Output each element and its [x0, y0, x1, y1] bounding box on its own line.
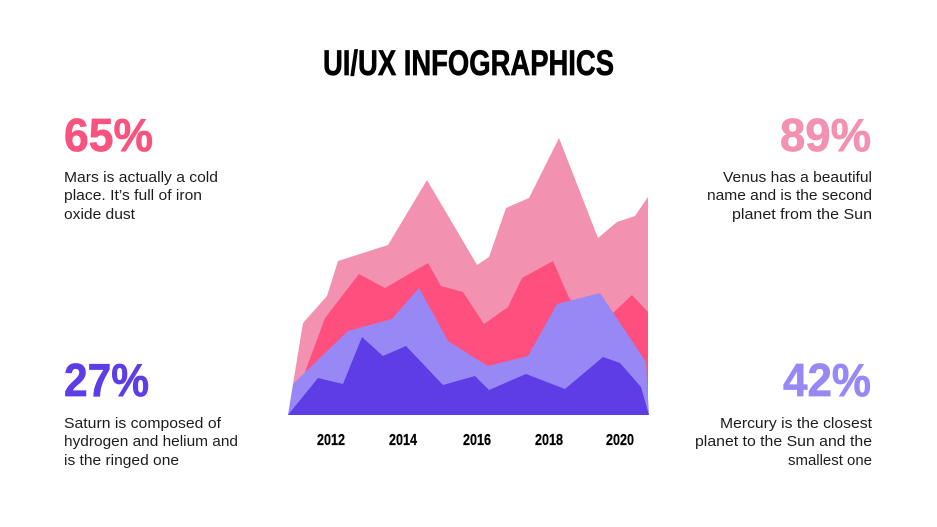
stat: 89%: 89%	[780, 109, 871, 161]
x-axis labels: 2014	[389, 432, 417, 449]
text block: Mars description	[64, 169, 218, 223]
series: lavender area	[288, 288, 649, 415]
text block: Mercury description: smallest one	[788, 452, 872, 469]
text block: Venus description: name and is the second	[707, 187, 872, 204]
text block: Mercury description: planet to the Sun and the	[695, 433, 872, 450]
text block: Saturn description: Saturn is composed of	[64, 415, 222, 432]
text block: Venus description: planet from the Sun	[732, 206, 872, 223]
text block: Mars description: Mars is actually a cold	[64, 169, 218, 186]
panel: Venus stat	[707, 109, 872, 223]
text block: Venus description: Venus has a beautiful	[723, 169, 872, 186]
stat: 65%: 65%	[64, 109, 153, 161]
series: pink area	[305, 261, 648, 415]
text block: Mars description: place. It’s full of iron	[64, 187, 202, 204]
stat: 42%: 42%	[783, 354, 871, 406]
x-axis labels	[317, 432, 634, 449]
area chart	[288, 138, 649, 449]
series: dark purple area	[288, 337, 649, 415]
stat: 27%: 27%	[64, 354, 149, 406]
text block: Saturn description	[64, 415, 238, 469]
text block: Saturn description: hydrogen and helium and	[64, 433, 238, 450]
x-axis labels: 2018	[535, 432, 563, 449]
panel: Mars stat	[64, 109, 218, 223]
text block: Mars description: oxide dust	[64, 206, 136, 223]
panel: Mercury stat	[695, 354, 873, 469]
x-axis labels: 2016	[463, 432, 491, 449]
title: UI/UX INFOGRAPHICS	[323, 44, 614, 83]
text block: Mercury description	[695, 415, 873, 469]
text block: Venus description	[707, 169, 872, 223]
series: light pink area	[293, 138, 648, 415]
panel: Saturn stat	[64, 354, 238, 469]
x-axis labels: 2020	[606, 432, 634, 449]
text block: Saturn description: is the ringed one	[64, 452, 179, 469]
text block: Mercury description: Mercury is the closest	[720, 415, 873, 432]
x-axis labels: 2012	[317, 432, 345, 449]
